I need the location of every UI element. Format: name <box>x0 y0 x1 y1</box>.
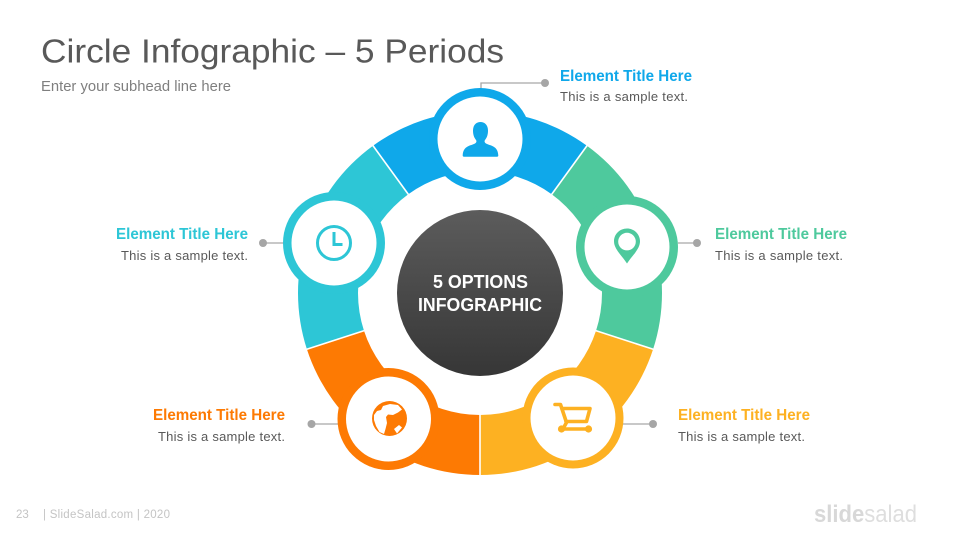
callout: bottom right: This is a sample text. <box>678 429 805 444</box>
callout: top: Element Title Here <box>560 68 692 85</box>
segment: blue <box>373 111 587 194</box>
callout: bottom left: This is a sample text. <box>158 429 285 444</box>
icon: map pin <box>614 228 640 264</box>
callout: bottom left: Element Title Here <box>153 407 285 424</box>
segment: teal <box>298 146 408 349</box>
node: left, clock <box>283 192 385 294</box>
node: bottom left, globe <box>338 368 440 470</box>
node: top, person <box>429 88 531 190</box>
callout: bottom left <box>153 407 285 444</box>
callout: bottom right <box>678 407 810 444</box>
icon: clock <box>318 226 350 260</box>
connector lines and dots <box>259 79 701 428</box>
node: right, pin <box>576 196 678 298</box>
footer: | SlideSalad.com | 2020 <box>43 509 170 521</box>
subhead: Enter your subhead line here <box>41 79 231 95</box>
ring diagram <box>298 111 662 476</box>
footer: 23 <box>16 509 29 521</box>
title: Circle Infographic – 5 Periods <box>41 34 504 70</box>
callout: right: Element Title Here <box>715 226 847 243</box>
callout: left <box>116 226 248 263</box>
segment: orange <box>307 331 480 475</box>
icon: globe <box>372 401 407 436</box>
callout: left: Element Title Here <box>116 226 248 243</box>
segment separators <box>306 145 654 476</box>
segment: yellow <box>480 331 653 475</box>
centre label <box>418 272 542 315</box>
callout: right <box>715 226 847 263</box>
callout: top <box>560 68 692 104</box>
centre label: 5 OPTIONS <box>433 272 528 292</box>
icon: person <box>463 122 498 157</box>
centre circle <box>397 210 563 376</box>
callout: right: This is a sample text. <box>715 248 843 263</box>
callout: left: This is a sample text. <box>121 248 248 263</box>
callout: bottom right: Element Title Here <box>678 407 810 424</box>
callout: top: This is a sample text. <box>560 89 688 104</box>
centre label: INFOGRAPHIC <box>418 295 542 315</box>
icon: shopping cart <box>555 404 590 431</box>
segment: green <box>552 146 662 349</box>
node: bottom right, cart <box>522 368 624 468</box>
logo wordmark: slidesalad <box>814 501 917 528</box>
